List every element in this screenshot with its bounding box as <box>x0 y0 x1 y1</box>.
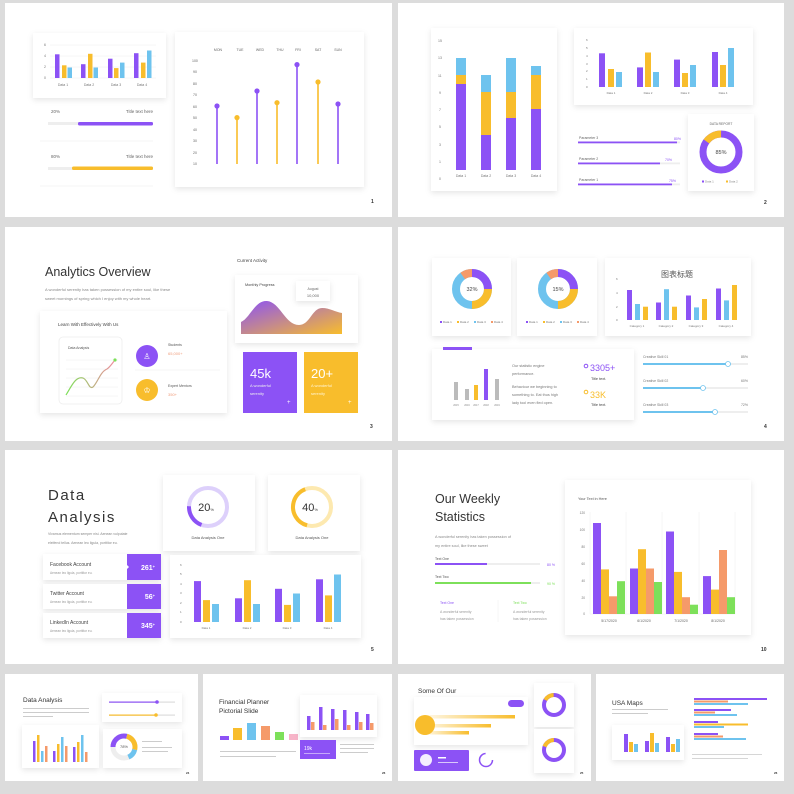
monthly progress card: August <box>308 287 318 291</box>
weekly bar chart card: 20 <box>581 596 585 600</box>
slide 4 <box>398 227 784 441</box>
grouped bar chart card: 4 <box>586 54 588 58</box>
text columns: has taken possession <box>440 617 474 621</box>
account rows: + <box>153 593 156 598</box>
small bar chart card: Data 2 <box>84 83 94 87</box>
statistic card: Behaviour we beginning to <box>512 385 557 389</box>
lollipop chart card: SAT <box>315 48 322 52</box>
donut card 2 <box>517 258 597 336</box>
slide C small: 25 <box>580 771 584 775</box>
account rows: Twitter Account <box>50 591 85 597</box>
lollipop chart card: 90 <box>193 70 197 74</box>
lollipop chart card: THU <box>276 48 284 52</box>
title <box>48 487 116 526</box>
ring card 20%: Data Analysis One <box>192 535 225 540</box>
learn card: Learn With Effectively With Us <box>58 322 119 327</box>
mentors icon <box>136 379 158 401</box>
lollipop chart card: SUN <box>334 48 342 52</box>
small bar chart card: 4 <box>44 54 46 58</box>
slide C small <box>398 674 591 781</box>
account rows: 261 <box>141 565 153 572</box>
title: Statistics <box>435 510 485 524</box>
stacked bar chart card: 1 <box>439 160 441 164</box>
lollipop chart card: 50 <box>193 116 197 120</box>
donut data report card: Data 1 <box>705 180 714 184</box>
progress: Text One <box>435 557 449 561</box>
skill sliders: Creative Skill 01 <box>643 355 668 359</box>
45k box <box>243 352 297 413</box>
stacked bar chart card: 7 <box>439 108 441 112</box>
parameter bars: 75% <box>669 179 676 183</box>
stacked bar chart card: Data 4 <box>531 174 541 178</box>
ring card 40% <box>268 475 360 551</box>
donut card 1: Data 2 <box>460 320 469 324</box>
paragraph: eleifend tellus. Aenean leo ligula, porttitor eu. <box>48 541 118 545</box>
account rows: LinkedIn Account <box>50 620 89 626</box>
chinese title chart card: 0 <box>616 318 618 322</box>
weekly bar chart card: Your Text in Here <box>578 497 607 501</box>
lollipop chart card: 10 <box>193 162 197 166</box>
20+ box: + <box>348 400 352 406</box>
stacked bar chart card: 9 <box>439 91 441 95</box>
parameter bars: 80% <box>674 137 681 141</box>
paragraph <box>435 535 512 548</box>
parameter bars: Parameter 2 <box>579 157 598 161</box>
donut card 1: Data 1 <box>443 320 452 324</box>
monthly progress card: Monthly Progress <box>245 283 275 287</box>
parameter bars: Parameter 1 <box>579 178 598 182</box>
text columns: has taken possession <box>513 617 547 621</box>
title <box>435 492 501 524</box>
slide C small: Some Of Our <box>418 688 457 695</box>
bar chart card: 5 <box>180 572 182 576</box>
19k box: 19k <box>304 746 313 752</box>
weekly bar chart card: 8/1/2020 <box>711 619 725 623</box>
account rows: + <box>153 564 156 569</box>
bar chart card: 0 <box>180 620 182 624</box>
grouped bar chart card: Data 1 <box>607 91 616 95</box>
45k box: 45k <box>250 366 271 381</box>
text columns: A wonderful serenity <box>513 610 545 614</box>
donut data report card: Data 2 <box>729 180 738 184</box>
19k box <box>300 740 336 759</box>
colored bars row <box>220 723 298 740</box>
progress rows: Title text here <box>126 109 153 114</box>
bar chart card: Data 3 <box>283 626 292 630</box>
bar chart card: 2 <box>180 601 182 605</box>
progress rows: Title text here <box>126 154 153 159</box>
slide A small <box>5 674 198 781</box>
slide D small <box>596 674 784 781</box>
page number: 10 <box>761 647 767 653</box>
paragraph: my entire soul, like these sweet <box>435 544 489 548</box>
progress: 80 % <box>547 563 555 567</box>
bar chart card: 3 <box>180 591 182 595</box>
lollipop chart card: 30 <box>193 139 197 143</box>
statistic card: something to. Eat thus high <box>512 393 558 397</box>
grouped bar chart card: 1 <box>586 77 588 81</box>
chinese title chart card: Category 4 <box>719 324 734 328</box>
statistic card: 2016 <box>464 404 470 407</box>
monthly progress card <box>235 275 358 343</box>
weekly bar chart card: 120 <box>580 511 585 515</box>
stacked bar chart card: Data 3 <box>506 174 516 178</box>
chinese title chart card: Category 2 <box>659 324 674 328</box>
learn card: 65,000+ <box>168 351 183 356</box>
donut card 2: Data 3 <box>563 320 572 324</box>
statistic card: 2018 <box>483 404 489 407</box>
statistic card: performance. <box>512 372 534 376</box>
stacked bar chart card: 13 <box>438 56 442 60</box>
statistic card: Title text. <box>591 403 606 407</box>
title: Analytics Overview <box>45 265 152 279</box>
donut card: 78% <box>120 744 128 749</box>
grouped bar chart card: Data 3 <box>681 91 690 95</box>
mini chart card <box>612 725 684 760</box>
slide 1 <box>5 3 392 217</box>
statistic card <box>432 347 634 420</box>
chinese title chart card: Category 3 <box>689 324 704 328</box>
account rows <box>43 554 161 638</box>
small bar chart card: 2 <box>44 65 46 69</box>
title: Analysis <box>48 509 116 526</box>
paragraph <box>48 532 128 545</box>
donut card 1: Data 3 <box>477 320 486 324</box>
grouped bar chart card: Data 4 <box>719 91 728 95</box>
stacked bar chart card: 15 <box>438 39 442 43</box>
chinese title chart card: 图表标题 <box>661 269 693 279</box>
donut card 1: Data 4 <box>494 320 503 324</box>
page number: 5 <box>371 647 374 653</box>
20+ box: serenity <box>311 391 325 396</box>
20+ box: 20+ <box>311 366 333 381</box>
donut data report card: 85% <box>715 150 727 156</box>
monthly progress card: 10,000 <box>307 293 320 298</box>
slide B small: Financial Planner <box>219 699 270 706</box>
account rows: + <box>153 622 156 627</box>
slide 5 <box>5 450 392 664</box>
page number: 4 <box>764 424 767 430</box>
purple stat box <box>414 750 469 771</box>
small bar chart card: Data 1 <box>58 83 68 87</box>
slide D small: 26 <box>774 771 778 775</box>
paragraph: A wonderful serenity has taken possession of my entire soul, like these <box>45 287 171 292</box>
paragraph: sweet mornings of spring which I enjoy with my whole heart. <box>45 296 151 301</box>
statistic card: Title text. <box>591 377 606 381</box>
bar chart card: Data 1 <box>202 626 211 630</box>
grouped bar chart card: 5 <box>586 46 588 50</box>
mini bar card <box>22 725 99 768</box>
text columns: A wonderful serenity <box>440 610 472 614</box>
progress: Text Two <box>435 575 449 579</box>
weekly bar chart card: 0 <box>583 612 585 616</box>
slide B small <box>203 674 392 781</box>
statistic card: 2017 <box>473 404 479 407</box>
donut data report card: DATA REPORT <box>710 122 732 126</box>
weekly bar chart card: 5/17/2020 <box>601 619 617 623</box>
stacked bar chart card: 5 <box>439 125 441 129</box>
text columns: Text Two <box>513 601 527 605</box>
account rows: Facebook Account <box>50 562 92 568</box>
donut card 1: 32% <box>466 287 478 293</box>
account rows: Aenean leo ligula, porttitor eu. <box>50 600 92 604</box>
grouped bar chart card: 2 <box>586 69 588 73</box>
lollipop chart card: 40 <box>193 128 197 132</box>
chinese title chart card: 6 <box>616 277 618 281</box>
text columns: Text One <box>440 601 454 605</box>
ring card 40%: 40% <box>302 502 318 514</box>
donut card <box>103 729 182 768</box>
progress rows: 80% <box>51 154 60 159</box>
chinese title chart card: 2 <box>616 305 618 309</box>
grouped bar chart card <box>574 28 753 105</box>
weekly bar chart card: 6/1/2020 <box>637 619 651 623</box>
parameter bars: Parameter 3 <box>579 136 598 140</box>
horizontal bar chart <box>694 698 767 740</box>
learn card: ♔ <box>143 386 151 395</box>
learn card: ♙ <box>143 352 151 361</box>
slide D small: USA Maps <box>612 700 643 707</box>
progress: 90 % <box>547 582 555 586</box>
learn card: Students <box>168 343 182 347</box>
stacked bar chart card <box>431 28 557 191</box>
lollipop chart card: 100 <box>192 59 198 63</box>
lollipop chart card: MON <box>214 48 223 52</box>
stacked bar chart card: 3 <box>439 143 441 147</box>
donut card 2: Data 2 <box>546 320 555 324</box>
weekly bar chart card: 7/1/2020 <box>674 619 688 623</box>
skill sliders: 72% <box>741 403 748 407</box>
account rows: Aenean leo ligula, porttitor eu. <box>50 571 92 575</box>
20+ box: A wonderful <box>311 383 332 388</box>
account rows: Aenean leo ligula, porttitor eu. <box>50 629 92 633</box>
paragraph: A wonderful serenity has taken possession of <box>435 535 512 539</box>
lollipop chart card: 20 <box>193 151 197 155</box>
lollipop chart card: TUE <box>236 48 244 52</box>
paragraph: Vivamus elementum semper nisi. Aenean vulputate <box>48 532 128 536</box>
learn card: 350+ <box>168 392 178 397</box>
weekly bar chart card: 60 <box>581 562 585 566</box>
stacked bar chart card: Data 2 <box>481 174 491 178</box>
slide 10 <box>398 450 784 664</box>
learn card: Expert Mentors <box>168 384 192 388</box>
progress <box>435 557 555 586</box>
page number: 1 <box>371 199 374 205</box>
page number: 3 <box>370 424 373 430</box>
chinese title chart card <box>605 258 751 336</box>
small bar chart card: 6 <box>44 43 46 47</box>
lollipop chart card <box>175 32 364 187</box>
45k box: serenity <box>250 391 264 396</box>
bar chart card: Data 2 <box>243 626 252 630</box>
account rows: 345 <box>141 623 153 630</box>
small bar chart card: Data 4 <box>137 83 147 87</box>
chinese title chart card: Category 1 <box>630 324 645 328</box>
bar chart card: 4 <box>180 582 182 586</box>
paragraph <box>45 287 171 301</box>
small bar chart card: 0 <box>44 76 46 80</box>
lollipop chart card: FRI <box>295 48 301 52</box>
lollipop chart card: WED <box>256 48 265 52</box>
skill sliders: Creative Skill 03 <box>643 403 668 407</box>
text columns <box>440 600 547 622</box>
statistic card: Our statistic engine <box>512 364 544 368</box>
progress rows: 20% <box>51 109 60 114</box>
ring card 20% <box>163 475 255 551</box>
small bar chart card: Data 3 <box>111 83 121 87</box>
donut data report card <box>688 114 754 191</box>
parameter bars: 70% <box>665 158 672 162</box>
ring card 20%: 20% <box>198 502 214 514</box>
title: Our Weekly <box>435 492 501 506</box>
slide B small: 26 <box>382 771 386 775</box>
current activity: Current Activity <box>237 258 268 263</box>
learn card <box>40 311 227 413</box>
45k box: + <box>287 400 291 406</box>
bar chart card: 1 <box>180 610 182 614</box>
bar chart card <box>170 555 361 638</box>
donut card 2: 15% <box>552 287 564 293</box>
slide 2 <box>398 3 784 217</box>
ring card 40%: Data Analysis One <box>296 535 329 540</box>
bar chart card: 6 <box>180 563 182 567</box>
weekly bar chart card: 80 <box>581 545 585 549</box>
lollipop chart card: 70 <box>193 93 197 97</box>
slide A small: Data Analysis <box>23 697 63 704</box>
statistic card: 33K <box>590 390 606 400</box>
slider card <box>102 693 182 722</box>
statistic card: 2015 <box>453 404 459 407</box>
weekly bar chart card: 40 <box>581 579 585 583</box>
grouped bar chart card: 3 <box>586 62 588 66</box>
lollipop chart card: 60 <box>193 105 197 109</box>
title: Data <box>48 487 86 504</box>
chinese title chart card: 4 <box>616 291 618 295</box>
skill sliders: 60% <box>741 379 748 383</box>
slide A small: 24 <box>186 771 190 775</box>
skill sliders: Creative Skill 02 <box>643 379 668 383</box>
statistic card: lady tool even fled open. <box>512 401 553 405</box>
grouped bar chart card: Data 2 <box>644 91 653 95</box>
slide 3 <box>5 227 392 441</box>
progress rows <box>40 109 153 186</box>
45k box: A wonderful <box>250 383 271 388</box>
grouped bar chart card: 6 <box>586 38 588 42</box>
skill sliders <box>643 355 748 414</box>
lollipop chart card: 80 <box>193 82 197 86</box>
line chart card <box>59 337 122 404</box>
stacked bar chart card: Data 1 <box>456 174 466 178</box>
stacked bar chart card: 0 <box>439 177 441 181</box>
page number: 2 <box>764 200 767 206</box>
ring icon <box>480 754 492 766</box>
chart card <box>300 695 377 737</box>
statistic card: 3305+ <box>590 363 615 373</box>
slide B small: Pictorial Slide <box>219 708 259 715</box>
weekly bar chart card: 100 <box>580 528 585 532</box>
students icon <box>136 345 158 367</box>
skill sliders: 85% <box>741 355 748 359</box>
grouped bar chart card: 0 <box>586 85 588 89</box>
weekly bar chart card <box>565 480 751 635</box>
small bar chart card <box>33 33 166 98</box>
donut card 2: Data 1 <box>529 320 538 324</box>
donut cards <box>534 683 574 773</box>
stacked bar chart card: 11 <box>438 74 442 78</box>
donut card 2: Data 4 <box>580 320 589 324</box>
gradient bar card <box>414 697 528 745</box>
line chart card: Data Analysis <box>68 346 89 350</box>
bar chart card: Data 4 <box>324 626 333 630</box>
parameter bars <box>578 136 681 185</box>
account rows: 56 <box>145 594 153 601</box>
donut card 1 <box>432 258 511 336</box>
statistic card: 2019 <box>494 404 500 407</box>
20+ box <box>304 352 358 413</box>
